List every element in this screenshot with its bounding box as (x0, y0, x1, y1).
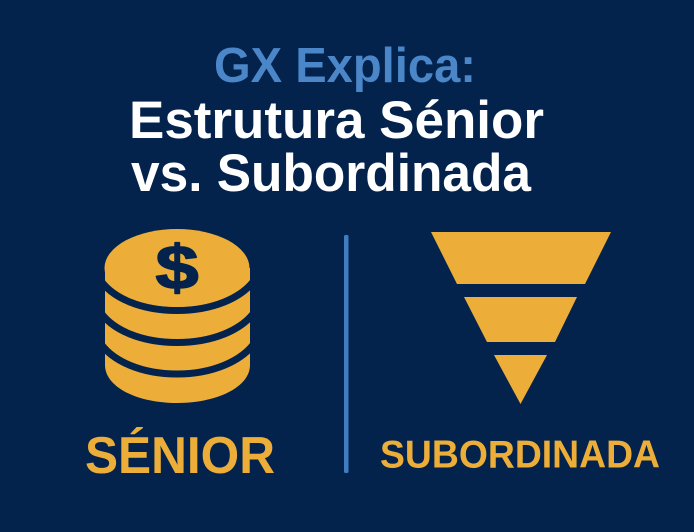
label: SUBORDINADA: SUBORDINADA (380, 434, 660, 476)
title: Estrutura Sénior: Estrutura Sénior (129, 91, 544, 150)
icon: stack of coins (94, 229, 261, 403)
title: GX Explica: GX Explica: (214, 39, 476, 93)
title: vs. Subordinada: vs. Subordinada (131, 144, 531, 203)
label: SÉNIOR: SÉNIOR (85, 427, 275, 485)
icon: dollar sign: $ (155, 232, 199, 302)
icon: inverted pyramid (431, 232, 611, 404)
divider (344, 235, 348, 473)
